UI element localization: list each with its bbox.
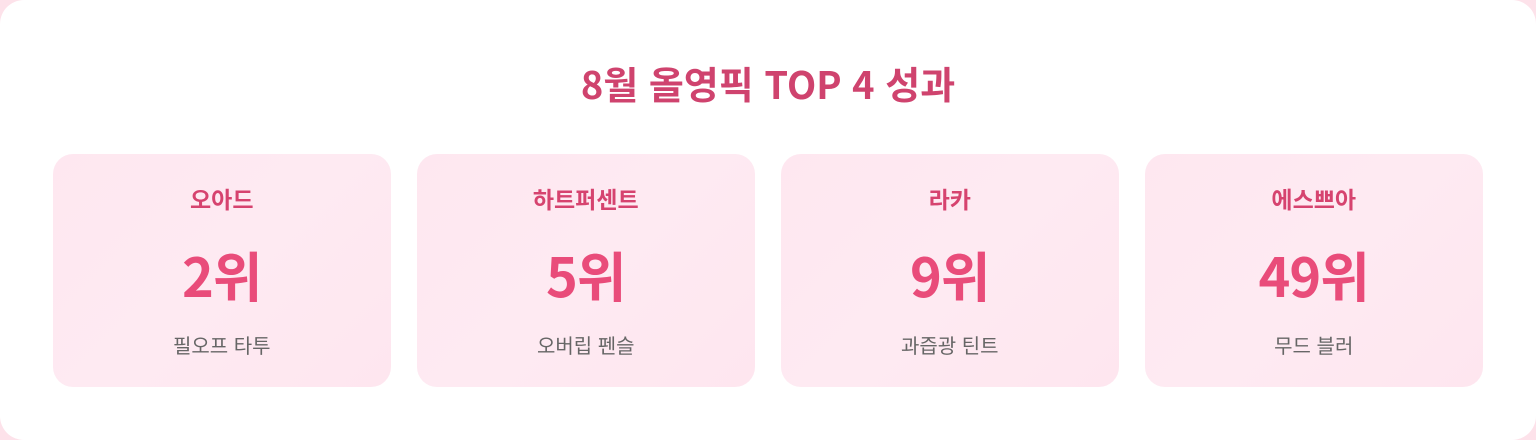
card: 라카 — [781, 154, 1118, 387]
title: 8월 올영픽 TOP 4 성과 — [581, 55, 955, 110]
product name: 오버립 펜슬 — [537, 330, 635, 359]
card: 하트퍼센트 — [417, 154, 754, 387]
rank: 49위 — [1259, 234, 1369, 312]
product name: 무드 블러 — [1274, 330, 1353, 359]
brand name: 오아드 — [190, 181, 253, 215]
rank: 9위 — [910, 234, 990, 312]
brand name: 라카 — [929, 181, 971, 215]
product name: 필오프 타투 — [173, 330, 271, 359]
card: 오아드 — [53, 154, 390, 387]
rank: 2위 — [182, 234, 262, 312]
card: 에스쁘아 — [1145, 154, 1482, 387]
brand name: 하트퍼센트 — [533, 181, 639, 215]
product name: 과즙광 틴트 — [901, 330, 999, 359]
brand name: 에스쁘아 — [1271, 181, 1356, 215]
rank: 5위 — [546, 234, 626, 312]
